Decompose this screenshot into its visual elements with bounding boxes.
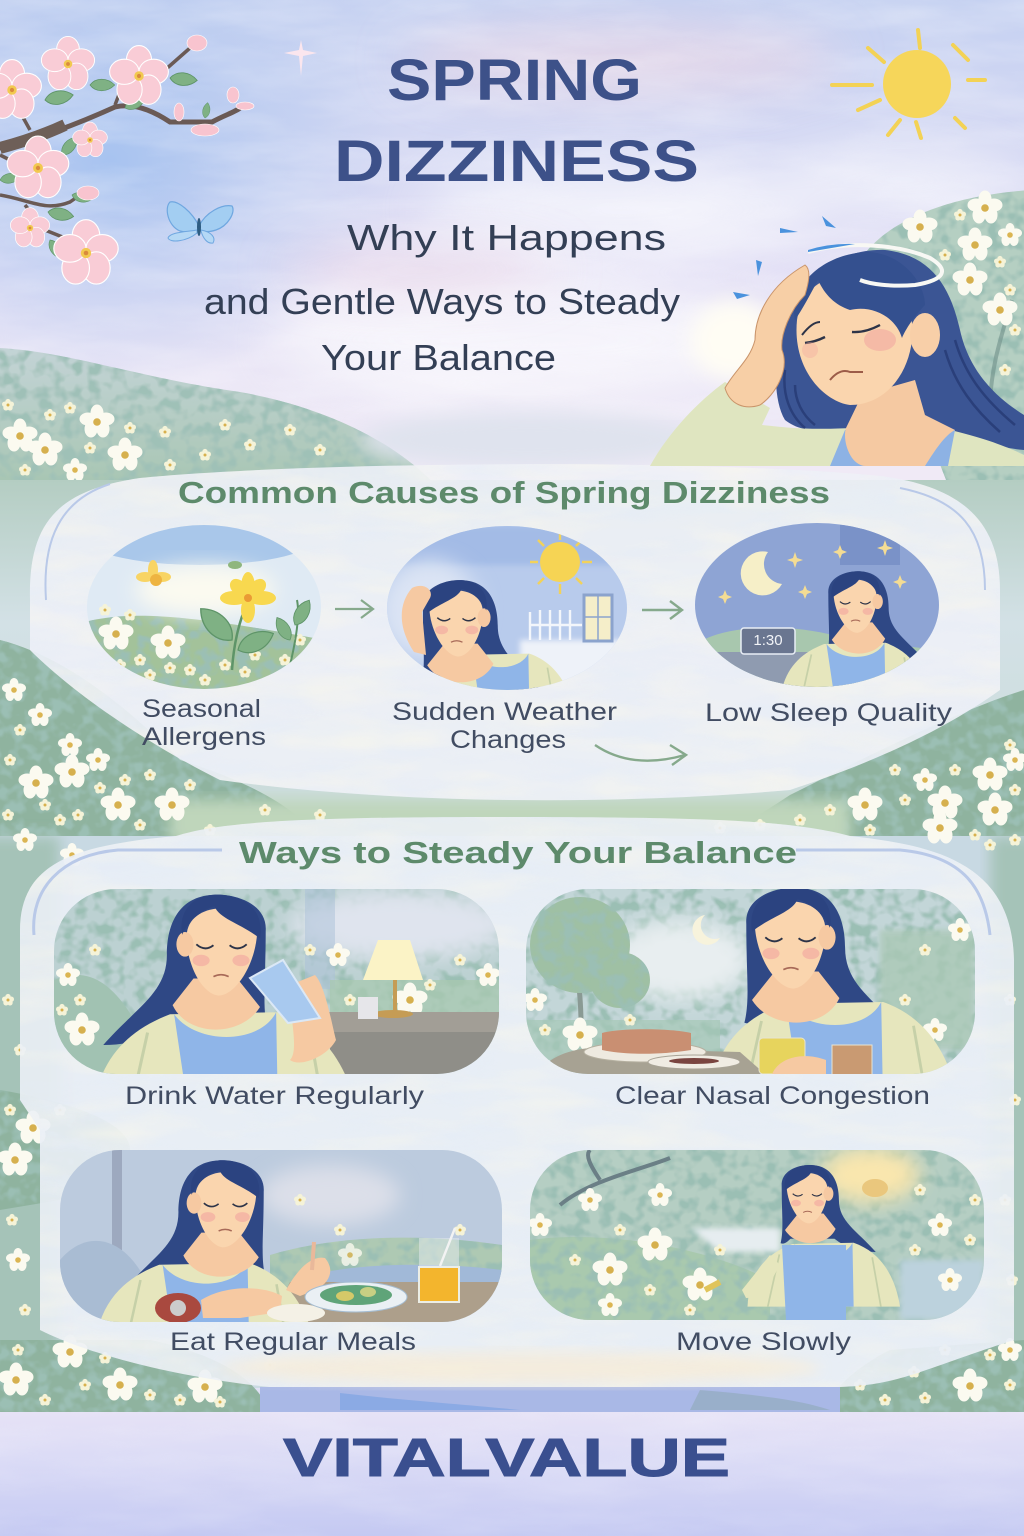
heading: causes: Common Causes of Spring Dizziness [178,475,830,510]
dizzy marks [733,216,855,299]
icon: water glass and hand [250,960,336,1063]
arrow: curved next [595,745,686,765]
glow behind hand [690,300,780,380]
icon: butterfly [167,202,233,243]
raised hand [725,265,809,407]
footer brand: VITALVALUE [283,1428,730,1488]
circle illustration: low sleep quality [695,523,939,687]
front hair [794,252,925,338]
panel: ways to steady your balance [20,817,1014,1387]
caption: sudden weather changes [392,698,617,754]
subtitle: Your Balance [321,337,556,378]
cardigan [650,382,1024,466]
illustration: dizzy woman [650,216,1024,466]
arrow: allergens to weather [335,600,373,618]
caption: eat regular meals: Eat Regular Meals [170,1328,416,1356]
caption: seasonal allergens: Allergens [142,723,266,751]
card illustration: clear nasal congestion [526,889,975,1074]
background: pastel sky [0,0,1024,490]
panel background [30,464,1000,800]
title [334,48,699,194]
closed eyes, brows, blush, mouth [802,322,880,380]
neck [845,380,955,466]
panel: common causes [30,464,1000,800]
icon: sparkle [284,40,317,76]
heading: ways: Ways to Steady Your Balance [239,835,797,870]
caption: move slowly: Move Slowly [676,1328,852,1356]
background: lower flower meadow [0,480,1024,1412]
title: DIZZINESS [334,129,699,194]
circle illustration: seasonal allergens [87,525,321,689]
subtitle: and Gentle Ways to Steady [204,281,680,322]
circle illustration: sudden weather changes [387,526,627,690]
icon: cherry blossom branch [0,35,254,284]
caption: drink water: Drink Water Regularly [125,1082,425,1110]
panel background [20,817,1014,1387]
subtitle [204,217,680,378]
icon: bedside clock: 1:30 [753,632,783,649]
card illustration: move slowly [528,1147,984,1320]
caption: seasonal allergens [142,695,266,751]
caption: clear nasal congestion: Clear Nasal Congestion [615,1082,930,1110]
arrow: weather to sleep [642,601,682,619]
caption: low sleep quality: Low Sleep Quality [705,699,953,727]
blue shirt [830,430,955,466]
card illustration: eat regular meals [60,1150,502,1322]
face [796,274,912,405]
hair back [776,250,1024,450]
icon: bedside clock [741,628,795,654]
card illustration: drink water regularly [54,889,499,1074]
hair strands [784,340,1015,432]
ear [910,313,940,357]
caption: seasonal allergens: Seasonal [142,695,261,723]
background: rolling meadow hills [0,190,1024,490]
icon: sun [832,30,985,138]
caption: sudden weather changes: Changes [450,726,566,754]
title: SPRING [387,48,642,113]
subtitle: Why It Happens [347,217,666,258]
caption: sudden weather changes: Sudden Weather [392,698,617,726]
halo ring [808,245,942,286]
footer band [0,1412,1024,1536]
